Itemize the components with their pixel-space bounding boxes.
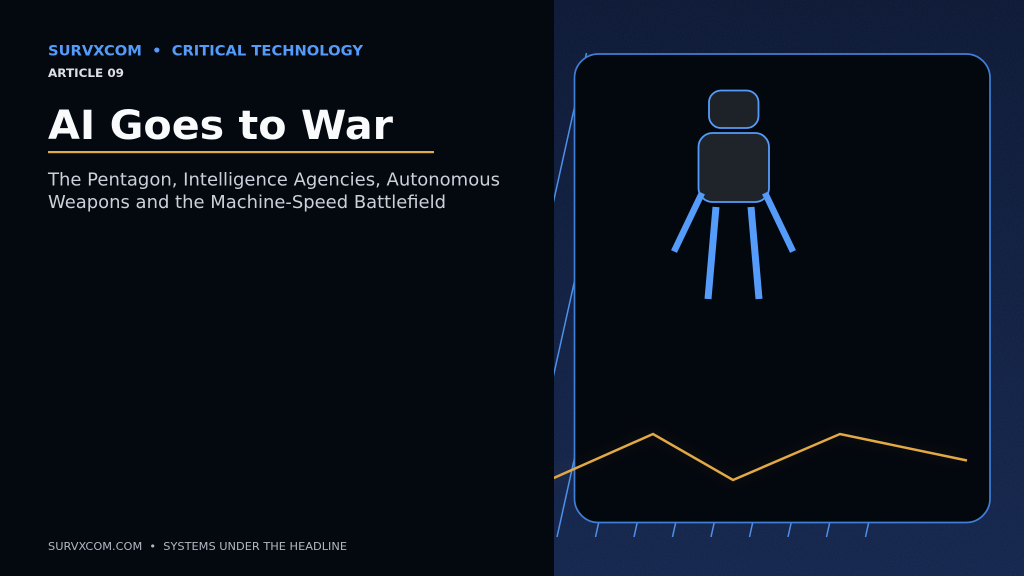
- article number: ARTICLE 09: [48, 66, 124, 80]
- robot head: [709, 90, 758, 128]
- title: AI Goes to War: [48, 103, 393, 149]
- robot body: [698, 133, 769, 202]
- subtitle: The Pentagon, Intelligence Agencies, Autonomous: [47, 170, 500, 190]
- kicker label: SURVXCOM • CRITICAL TECHNOLOGY: [48, 44, 363, 60]
- panel: right textured background: [554, 0, 1024, 576]
- subtitle: Weapons and the Machine-Speed Battlefield: [48, 193, 446, 213]
- subtitle: [47, 170, 500, 213]
- chart: gold signal line: [520, 434, 967, 493]
- panel: dark illustration frame: [574, 54, 990, 522]
- robot limbs: [674, 193, 793, 299]
- diagonal hatch lines behind the frame: [479, 53, 972, 537]
- footer: SURVXCOM.COM • SYSTEMS UNDER THE HEADLINE: [48, 540, 347, 553]
- panel: left dark column: [0, 0, 554, 576]
- icon: robot figure: [674, 90, 793, 299]
- title underline: [48, 151, 434, 153]
